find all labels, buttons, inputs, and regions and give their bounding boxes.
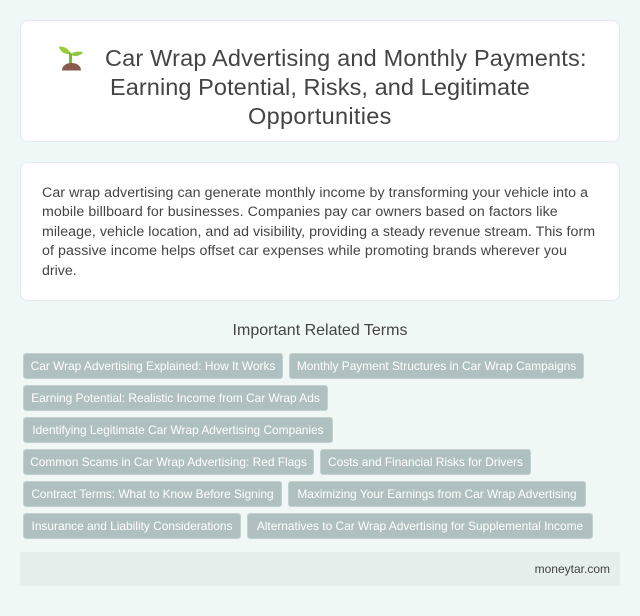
panel: description card bbox=[20, 162, 620, 301]
tag: Earning Potential: Realistic Income from Car Wrap Ads bbox=[31, 391, 320, 405]
tag: Monthly Payment Structures in Car Wrap Campaigns bbox=[297, 359, 576, 373]
tag bbox=[23, 449, 314, 475]
text block: description: of passive income helps offset car expenses while promoting brands wherever you bbox=[42, 243, 567, 259]
tag bbox=[23, 417, 333, 443]
tag bbox=[23, 513, 241, 539]
heading: important related terms: Important Related Terms bbox=[233, 322, 407, 339]
tag: Insurance and Liability Considerations bbox=[32, 519, 232, 533]
tag: Car Wrap Advertising Explained: How It Works bbox=[31, 359, 275, 373]
tag: Contract Terms: What to Know Before Signing bbox=[31, 487, 274, 501]
title bbox=[105, 45, 587, 129]
tag bbox=[289, 353, 584, 379]
text block: description bbox=[42, 185, 595, 279]
tag bbox=[320, 449, 531, 475]
tag list bbox=[23, 353, 593, 539]
text block: description: mobile billboard for businesses. Companies pay car owners based on factors like bbox=[42, 204, 558, 220]
tag bbox=[23, 481, 282, 507]
title: Car Wrap Advertising and Monthly Payments: bbox=[105, 45, 587, 71]
tag bbox=[288, 481, 586, 507]
title: Opportunities bbox=[248, 103, 392, 129]
tag bbox=[247, 513, 593, 539]
tag bbox=[23, 385, 328, 411]
tag: Costs and Financial Risks for Drivers bbox=[328, 455, 523, 469]
tag: Identifying Legitimate Car Wrap Advertising Companies bbox=[32, 423, 324, 437]
icon: seedling bbox=[59, 46, 83, 70]
panel: title card bbox=[20, 20, 620, 142]
footer bar bbox=[20, 552, 620, 586]
footer text: source: moneytar.com bbox=[535, 562, 610, 576]
text block: description: Car wrap advertising can generate monthly income by transforming your vehicle into a bbox=[42, 185, 588, 201]
tag: Alternatives to Car Wrap Advertising for Supplemental Income bbox=[257, 519, 583, 533]
title: Earning Potential, Risks, and Legitimate bbox=[110, 74, 530, 100]
tag bbox=[23, 353, 283, 379]
tag: Common Scams in Car Wrap Advertising: Red Flags bbox=[30, 455, 307, 469]
text block: description: drive. bbox=[42, 263, 77, 279]
text block: description: mileage, vehicle location, and ad visibility, providing a steady revenue stream. This form bbox=[42, 224, 595, 240]
tag: Maximizing Your Earnings from Car Wrap Advertising bbox=[297, 487, 577, 501]
